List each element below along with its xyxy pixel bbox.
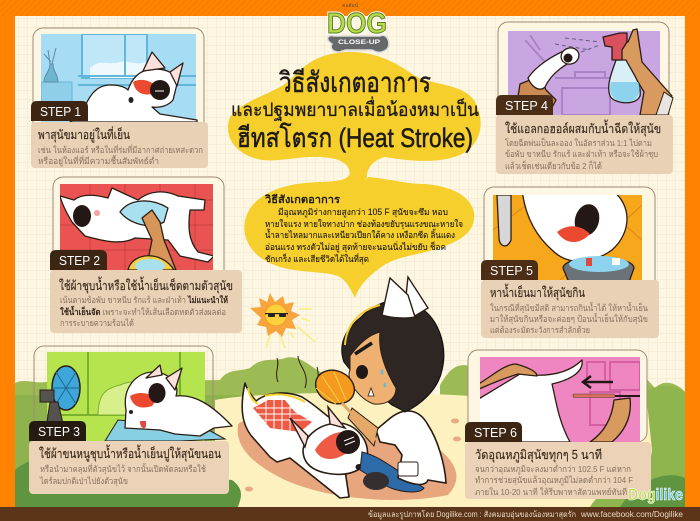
step 6 caption: จนกว่าอุณหภูมิจะลงมาต่ำกว่า 102.5 F แต่หาก — [475, 463, 631, 475]
step 2 caption: ใช้ผ้าชุบน้ำหรือใช้น้ำเย็นเช็ดตามตัวสุนัข — [59, 276, 233, 294]
brand: Dogilike: Dogilike — [628, 485, 683, 504]
step 3 caption: หรือนำมาคลุมที่ตัวสุนัขไว้ จากนั้นเปิดพัดลมหรือใช้ — [40, 462, 206, 475]
title text — [231, 67, 479, 153]
step 4 tag — [496, 95, 553, 115]
step 1 caption: หรืออยู่ในที่ที่มีความชื้นสัมพัทธ์ต่ำ — [38, 154, 159, 167]
step 2 caption: เน้นตามข้อพับ ขาหนีบ รักแร้ และฝ่าเท้า ไม่แนะนำให้ — [60, 295, 228, 305]
illustration: vet with paper fan — [310, 277, 446, 492]
landscape: bushes and ground — [15, 357, 685, 507]
step 3 caption — [29, 441, 229, 494]
step 2 caption: ใช้น้ำเย็นจัด เพราะจะทำให้เส้นเลือดหดตัวส่งผลต่อ — [60, 305, 226, 317]
logo: Dog Close-Up: DOG — [327, 8, 387, 40]
footer bar: ข้อมูลและรูปภาพโดย Dogilike.com : สังคมอบอุ่นของน้องหมาสุดรัก — [368, 509, 576, 520]
step 3 illustration — [40, 352, 232, 441]
step 6 tag — [465, 422, 522, 442]
step 1 caption — [31, 122, 208, 168]
step 2 caption — [50, 270, 242, 333]
step 2 illustration — [60, 184, 214, 273]
step 5 caption: หาน้ำเย็นมาให้สุนัขกิน — [490, 283, 585, 301]
logo: Dog Close-Up — [327, 2, 389, 53]
step 6 caption: ภายใน 10-20 นาที ให้รีบพาหาสัตวแพทย์ทันที — [475, 487, 627, 497]
title text: และปฐมพยาบาลเมื่อน้องหมาเป็น — [231, 96, 479, 121]
step 4 caption: แล้วเช็ดเช่นเดียวกับข้อ 2 ก็ได้ — [505, 160, 602, 171]
step 1 illustration — [41, 34, 197, 122]
step 2 caption: การระบายความร้อนได้ — [60, 318, 134, 328]
step 3 tag: STEP 3 — [38, 425, 80, 439]
symptoms speech bubble: วิธีสังเกตอาการ — [264, 193, 340, 206]
logo: Dog Close-Up: DOG — [327, 8, 387, 40]
step 4 caption — [496, 115, 673, 174]
step 6 illustration — [477, 357, 640, 442]
panel: step 5 — [481, 187, 659, 338]
step 5 illustration — [493, 195, 642, 280]
symptoms speech bubble — [244, 175, 474, 298]
step 1 caption: เช่น ในห้องแอร์ หรือในที่ร่มที่มีอากาศถ่ายเทสะดวก — [38, 144, 203, 155]
step 3 tag — [29, 421, 86, 441]
step 2 tag — [50, 250, 107, 270]
step 1 tag — [31, 101, 88, 121]
logo: Dog Close-Up: by Dogilike.com — [341, 49, 366, 53]
step 4 illustration — [508, 29, 673, 115]
logo: Dog Close-Up: CLOSE-UP — [338, 39, 381, 46]
title text: วิธีสังเกตอาการ — [279, 67, 431, 98]
illustration: overheated dog — [242, 383, 367, 498]
step 3 caption: ใช้ผ้าขนหนูชุบน้ำหรือน้ำเย็นปูให้สุนัขนอน — [39, 444, 221, 462]
step 1 caption: พาสุนัขมาอยู่ในที่เย็น — [38, 126, 130, 143]
step 4 tag: STEP 4 — [505, 99, 548, 113]
step 4 caption: โดยฉีดพ่นเป็นละออง ในอัตราส่วน 1:1 ไปตาม — [505, 137, 652, 148]
step 5 caption: ในกรณีที่สุนัขมีสติ สามารถกินน้ำได้ ให้หาน้ำเย็น — [490, 301, 648, 314]
step 4 caption: ใช้แอลกอฮอล์ผสมกับน้ำฉีดให้สุนัข — [505, 119, 661, 137]
symptoms speech bubble: หายใจแรง หายใจทางปาก ช่องท้องขยับรุนแรงขณะหายใจ — [265, 219, 463, 230]
step 5 caption: แต่ต้องระมัดระวังการสำลักด้วย — [490, 325, 590, 335]
symptoms speech bubble: ชักเกร็ง และเสียชีวิตได้ในที่สุด — [265, 253, 369, 265]
title text: ฮีทสโตรก (Heat Stroke) — [237, 123, 473, 153]
step 3 caption: ไดร์ลมปกติเป่าไปยังตัวสุนัข — [39, 476, 128, 487]
panel: step 6 — [465, 350, 651, 499]
panel: step 3 — [29, 346, 232, 494]
logo: Dog Close-Up: คอลัมน์ — [342, 2, 359, 9]
symptoms speech bubble: อ่อนแรง ทรงตัวไม่อยู่ สุดท้ายจะนอนนิ่งไม่ขยับ ช็อค — [265, 241, 446, 253]
step 5 tag — [481, 260, 538, 280]
step 5 caption: มาให้สุนัขกินหรือจะค่อยๆ ป้อนน้ำเย็นให้กับสุนัข — [490, 312, 648, 325]
panel: step 1 — [31, 28, 208, 168]
panel: step 2 — [50, 177, 242, 333]
step 1 tag: STEP 1 — [40, 105, 81, 119]
step 2 tag: STEP 2 — [59, 254, 100, 268]
symptoms speech bubble: น้ำลายไหลมากและเหนียวเปียกใต้คาง เหงือกซีด ลิ้นแดง — [265, 228, 455, 240]
step 6 tag: STEP 6 — [474, 426, 517, 440]
footer bar — [0, 507, 700, 521]
step 6 caption: วัดอุณหภูมิสุนัขทุกๆ 5 นาที — [475, 448, 602, 463]
step 6 caption — [465, 442, 651, 499]
step 5 caption — [481, 280, 659, 338]
panel: step 4 — [496, 22, 673, 174]
title blob — [228, 52, 481, 184]
icon: sun with sunglasses — [250, 293, 315, 348]
step 5 tag: STEP 5 — [490, 264, 533, 278]
step 4 caption: ข้อพับ ขาหนีบ รักแร้ และฝ่าเท้า หรือจะใช้ผ้าชุบ — [505, 149, 658, 160]
icon: heat waves — [277, 356, 320, 392]
symptoms speech bubble: มีอุณหภูมิร่างกายสูงกว่า 105 F สุนัขจะซึม หอบ — [278, 207, 448, 218]
footer bar: www.facebook.com/Dogilike — [580, 510, 684, 519]
step 6 caption: ทำการช่วยสุนัขแล้วอุณหภูมิไม่ลดต่ำกว่า 104 F — [475, 474, 633, 486]
